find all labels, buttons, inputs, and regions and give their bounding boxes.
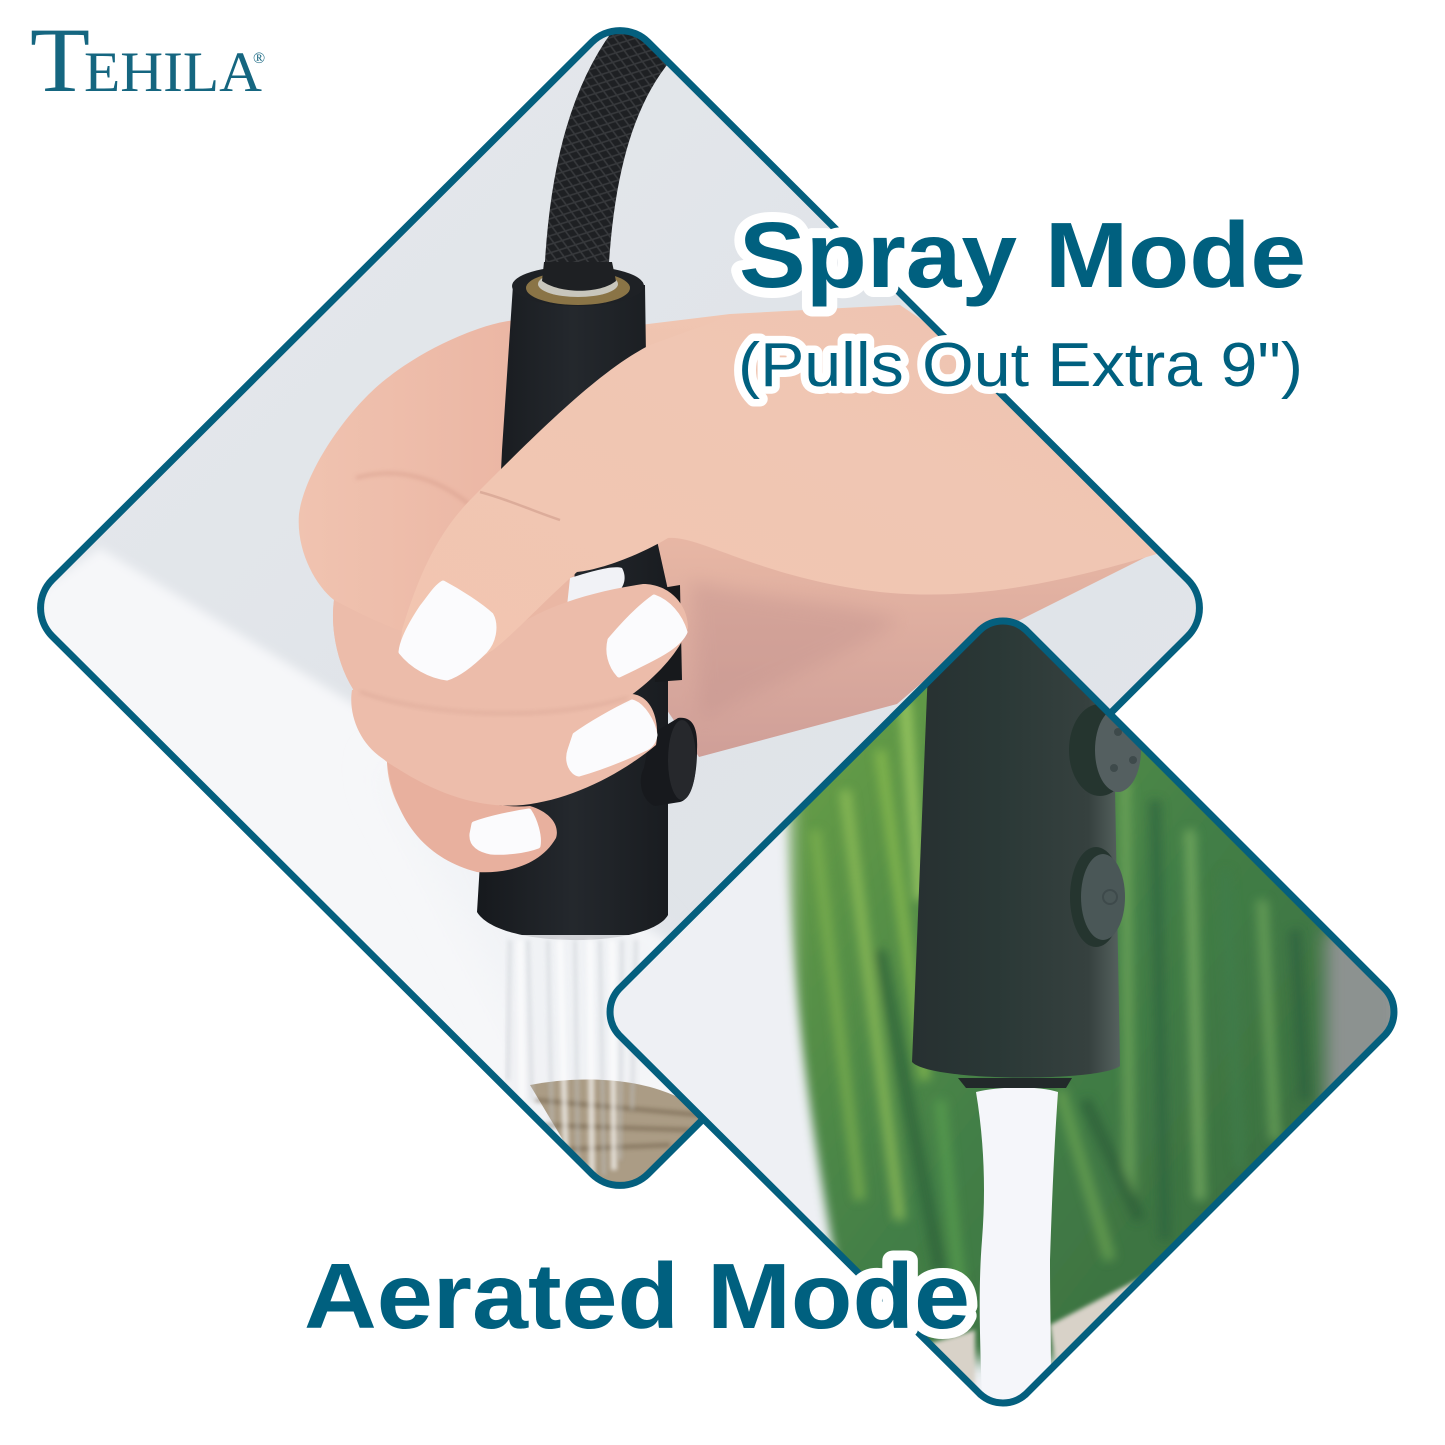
button: spray (1069, 704, 1141, 796)
photo backdrop (44, 36, 1196, 1096)
panel: aerated mode photo diamond (600, 610, 1410, 1420)
hand: skin between thumb and middle finger (525, 574, 575, 621)
hose (576, 40, 646, 280)
photo backdrop with grass (614, 687, 1390, 1390)
logo: Tehila (30, 9, 265, 111)
hand: fist behind sprayer (298, 320, 511, 872)
sprayer body (477, 262, 668, 940)
nail: pinky (472, 811, 538, 852)
heading: Aerated Mode: Aerated Mode (304, 1244, 970, 1348)
logo: Tehila: ® (253, 50, 265, 67)
hand: pinky (387, 762, 557, 872)
logo: Tehila: EHILA (84, 41, 262, 104)
logo: Tehila: T (30, 9, 90, 111)
sprayer side button (668, 718, 698, 804)
nail: ring finger (569, 702, 655, 774)
nail: thumb (401, 583, 494, 678)
aerated sprayer body (912, 620, 1141, 1088)
hand: palm and wrist (640, 305, 1170, 757)
aerated diamond border (610, 621, 1394, 1403)
heading: Spray Mode: Spray Mode (739, 203, 1306, 307)
subheading: pulls out extra 9 inches: (Pulls Out Extra 9") (738, 331, 1303, 400)
nail: middle finger (609, 597, 685, 675)
hand: index nail behind thumb (567, 567, 625, 606)
hand: thumb and back of hand (400, 305, 1170, 680)
spray diamond border (41, 31, 1199, 1185)
button: aerated (1070, 847, 1125, 947)
panel: spray mode photo diamond (30, 20, 1210, 1200)
water spray (505, 935, 705, 1185)
hand: ring finger (351, 690, 657, 806)
hand: middle finger (333, 584, 688, 700)
aerated water stream (976, 1088, 1058, 1400)
small button behind fingers (667, 585, 682, 681)
